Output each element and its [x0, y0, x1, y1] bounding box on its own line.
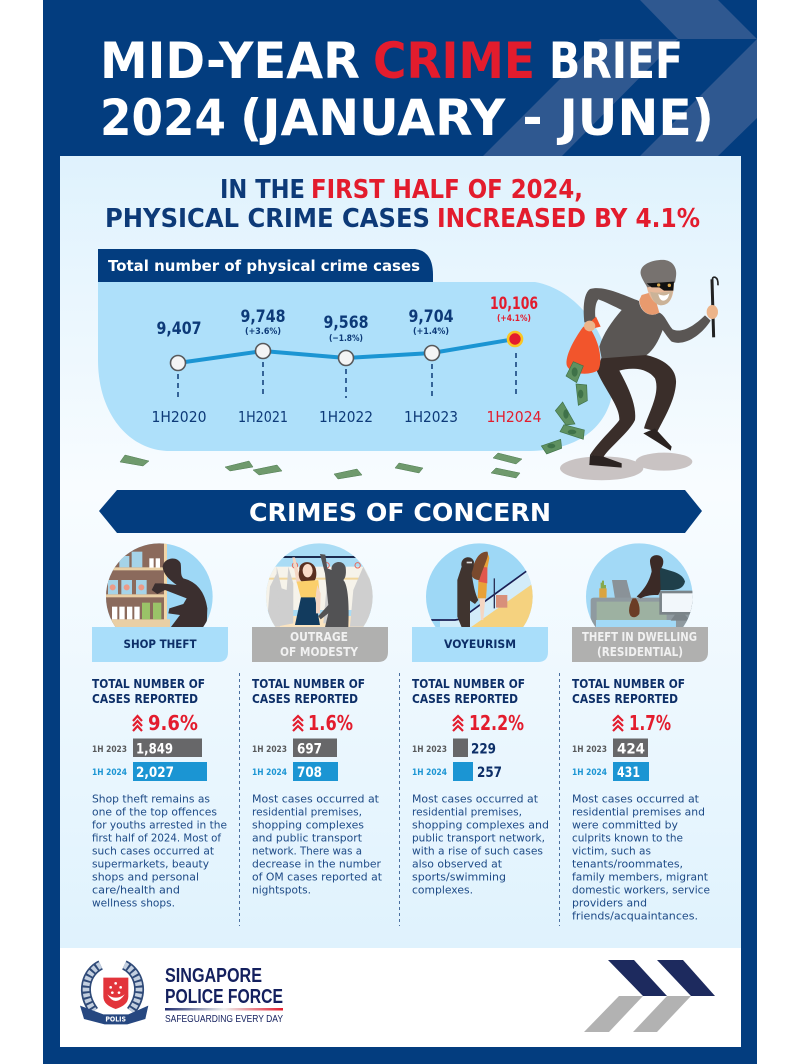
bar row: 1H 2024	[412, 762, 502, 781]
bar row: 1H 2024: 257	[477, 765, 502, 781]
description text: Most cases occurred at	[572, 794, 699, 806]
description text: culprits known to the	[572, 832, 683, 844]
subtitle heading	[105, 175, 700, 234]
description text: public transport network,	[412, 832, 545, 844]
bar row: 1H 2023: 1H 2023	[252, 745, 287, 755]
banner: crimes of concern: CRIMES OF CONCERN	[249, 498, 551, 527]
value labels: 10,106	[490, 294, 538, 313]
chart: total physical crime cases	[98, 249, 612, 451]
heading: total cases: TOTAL NUMBER OF	[92, 677, 205, 691]
icon: train carriage illustration	[263, 540, 377, 627]
panel: theft in dwelling	[572, 540, 710, 922]
heading: total cases	[572, 677, 685, 706]
panel: voyeurism	[412, 540, 549, 896]
description text: Most cases occurred at	[412, 794, 538, 806]
title: (JANUARY - JUNE)	[240, 89, 714, 147]
description text: network. There was a	[252, 846, 362, 858]
value labels: 9,407	[156, 319, 202, 338]
title: MID-YEAR	[100, 32, 360, 90]
decorative chevrons	[483, 0, 757, 156]
icon: shop theft illustration	[103, 540, 217, 627]
description text: supermarkets, beauty	[92, 858, 209, 870]
bar row: 1H 2024: 2,027	[136, 765, 174, 781]
year labels: 1H2022	[319, 408, 373, 426]
label: theft in dwelling: THEFT IN DWELLING	[582, 629, 697, 644]
description text: also observed at	[412, 858, 502, 870]
year labels: 1H2020	[152, 408, 206, 426]
description text: providers and	[572, 898, 647, 910]
value labels: (+4.1%)	[497, 314, 531, 324]
value labels: (+1.4%)	[413, 327, 449, 337]
description text	[572, 794, 710, 922]
heading: total cases: TOTAL NUMBER OF	[572, 677, 685, 691]
year labels	[152, 408, 542, 426]
description text: shopping complexes and	[412, 820, 549, 832]
heading: total cases	[92, 677, 205, 706]
chart background	[98, 282, 612, 451]
title: CRIME	[373, 32, 535, 90]
label: outrage of modesty: OUTRAGE	[290, 629, 348, 644]
label: outrage of modesty	[252, 627, 388, 662]
percentage change: 1.6%	[308, 711, 353, 735]
label: voyeurism: VOYEURISM	[444, 637, 516, 651]
drop lines	[178, 353, 516, 398]
bar row: 1H 2024: 1H 2024	[572, 768, 607, 778]
column dividers	[240, 673, 560, 926]
bar row: 1H 2024: 1H 2024	[412, 768, 447, 778]
bar row: 1H 2024: 431	[617, 765, 640, 781]
bar row: 1H 2023: 1,849	[136, 742, 173, 758]
label: theft in dwelling	[572, 627, 708, 662]
description text: with a rise of such cases	[412, 846, 543, 858]
bar row: 1H 2023	[412, 738, 496, 758]
logo wordmark	[165, 965, 283, 1025]
value labels: 9,568	[324, 313, 368, 332]
bar row: 1H 2024	[572, 762, 649, 781]
value labels: (−1.8%)	[329, 334, 363, 344]
percentage change: 1.7%	[629, 711, 671, 735]
description text: decrease in the number	[252, 858, 382, 870]
label: outrage of modesty: OF MODESTY	[280, 644, 359, 659]
panel: outrage of modesty	[252, 540, 388, 896]
label: shop theft: SHOP THEFT	[124, 637, 197, 651]
description text: Most cases occurred at	[252, 794, 379, 806]
icon: up chevrons	[133, 716, 142, 731]
description text: shops and personal	[92, 872, 199, 884]
description text: friends/acquaintances.	[572, 910, 698, 922]
heading: total cases: TOTAL NUMBER OF	[412, 677, 525, 691]
description text: such cases occurred at	[92, 846, 214, 858]
heading: total cases: CASES REPORTED	[252, 692, 358, 706]
subtitle heading: IN THE	[220, 175, 305, 205]
subtitle heading: PHYSICAL CRIME CASES	[105, 204, 430, 234]
footer band	[60, 948, 741, 1047]
description text: for youths arrested in the	[92, 820, 227, 832]
banner: crimes of concern	[99, 490, 702, 533]
bar row: 1H 2024: 708	[297, 765, 322, 781]
bar row: 1H 2024: 1H 2024	[92, 768, 127, 778]
bar row: 1H 2023: 697	[297, 742, 322, 758]
trend line	[178, 339, 515, 363]
title	[100, 32, 714, 147]
bar row: 1H 2024: 1H 2024	[252, 768, 287, 778]
bar row: 1H 2023	[92, 738, 202, 758]
description text: of OM cases reported at	[252, 872, 382, 884]
percentage change: 12.2%	[469, 711, 524, 735]
illustration: fleeing thief	[541, 260, 718, 480]
data points	[170, 332, 522, 370]
heading: total cases: CASES REPORTED	[572, 692, 678, 706]
icon: residential theft illustration	[583, 540, 697, 627]
description text: nightspots.	[252, 884, 311, 896]
bar row: 1H 2024	[92, 762, 207, 781]
description text: victim, such as	[572, 846, 651, 858]
bar row: 1H 2023: 424	[617, 742, 645, 758]
description text: shopping complexes	[252, 820, 364, 832]
heading: total cases	[252, 677, 365, 706]
description text	[412, 794, 549, 896]
heading: total cases: CASES REPORTED	[92, 692, 198, 706]
bar row: 1H 2023: 1H 2023	[92, 745, 127, 755]
bar row: 1H 2024	[252, 762, 338, 781]
title: BRIEF	[549, 32, 683, 90]
percentage change: 9.6%	[148, 711, 198, 735]
icon: footer chevrons	[584, 960, 715, 1032]
description text	[252, 794, 382, 896]
year labels: 1H2023	[404, 408, 458, 426]
description text: complexes.	[412, 884, 473, 896]
label: voyeurism	[412, 627, 548, 662]
main light panel	[60, 156, 741, 948]
value labels: 9,748	[240, 307, 286, 326]
subtitle heading: INCREASED BY 4.1%	[437, 204, 700, 234]
icon: up chevrons	[293, 716, 303, 731]
panel: shop theft	[92, 540, 228, 910]
description text: residential premises,	[252, 806, 362, 818]
description text: were committed by	[572, 820, 678, 832]
description text	[92, 794, 227, 910]
title: 2024	[100, 89, 226, 147]
logo wordmark: SAFEGUARDING EVERY DAY	[165, 1013, 283, 1025]
bar row: 1H 2023	[252, 738, 337, 758]
description text: one of the top offences	[92, 806, 217, 818]
description text: tenants/roommates,	[572, 858, 683, 870]
value labels: (+3.6%)	[245, 327, 281, 337]
heading: total cases: CASES REPORTED	[412, 692, 518, 706]
label: shop theft	[92, 627, 228, 662]
bar row: 1H 2023: 1H 2023	[412, 745, 447, 755]
description text: family members, migrant	[572, 872, 708, 884]
value labels	[156, 294, 538, 344]
heading: total cases	[412, 677, 525, 706]
year labels: 1H2021	[238, 408, 288, 426]
subtitle heading: FIRST HALF OF 2024,	[311, 175, 583, 205]
icon: up chevrons	[613, 716, 623, 731]
icon: police crest	[80, 965, 148, 1024]
description text: wellness shops.	[92, 898, 175, 910]
description text: Shop theft remains as	[92, 794, 210, 806]
year labels: 1H2024	[486, 408, 542, 426]
chart heading tab	[98, 249, 433, 282]
description text: care/health and	[92, 884, 180, 896]
icon: escalator illustration	[423, 540, 537, 627]
description text: first half of 2024. Most of	[92, 832, 221, 844]
icon: up chevrons	[453, 716, 463, 731]
scattered banknotes	[120, 453, 522, 479]
description text: and public transport	[252, 832, 362, 844]
description text: residential premises,	[412, 806, 522, 818]
bar row: 1H 2023: 1H 2023	[572, 745, 607, 755]
bar row: 1H 2023	[572, 738, 648, 758]
label: theft in dwelling: (RESIDENTIAL)	[597, 644, 683, 659]
bar row: 1H 2023: 229	[471, 742, 496, 758]
description text: residential premises and	[572, 806, 705, 818]
description text: sports/swimming	[412, 872, 506, 884]
icon: police crest: POLIS	[105, 1016, 126, 1024]
chart heading tab: Total number of physical crime cases	[108, 257, 420, 275]
logo wordmark: POLICE FORCE	[165, 986, 283, 1008]
heading: total cases: TOTAL NUMBER OF	[252, 677, 365, 691]
logo wordmark: SINGAPORE	[165, 965, 262, 987]
description text: domestic workers, service	[572, 884, 710, 896]
value labels: 9,704	[408, 307, 454, 326]
